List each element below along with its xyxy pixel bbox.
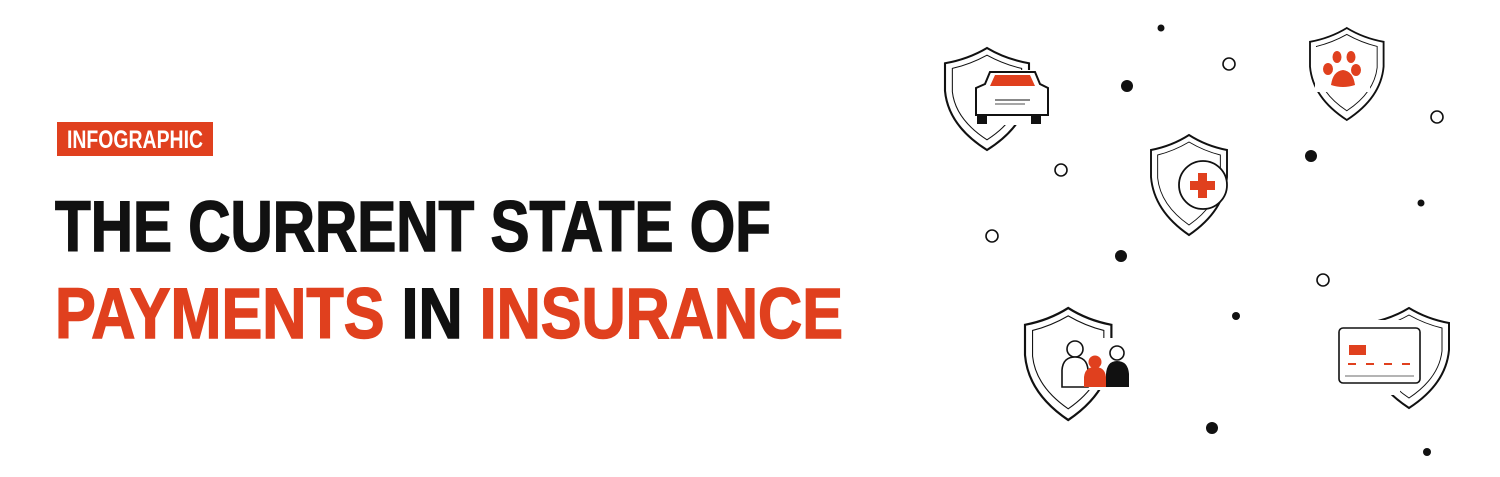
icon: card shield bbox=[1330, 308, 1449, 408]
icon: paw shield bbox=[1310, 28, 1384, 120]
decorative dots bbox=[1115, 24, 1431, 456]
icon: medical shield bbox=[1151, 135, 1227, 235]
title line 2: PAYMENTS IN INSURANCE bbox=[55, 275, 843, 354]
title line 1: THE CURRENT STATE OF bbox=[55, 188, 771, 267]
icon: car shield bbox=[945, 48, 1048, 150]
icon: family shield bbox=[1025, 308, 1132, 420]
badge: INFOGRAPHIC: INFOGRAPHIC bbox=[67, 126, 203, 154]
badge: INFOGRAPHIC bbox=[57, 122, 213, 156]
